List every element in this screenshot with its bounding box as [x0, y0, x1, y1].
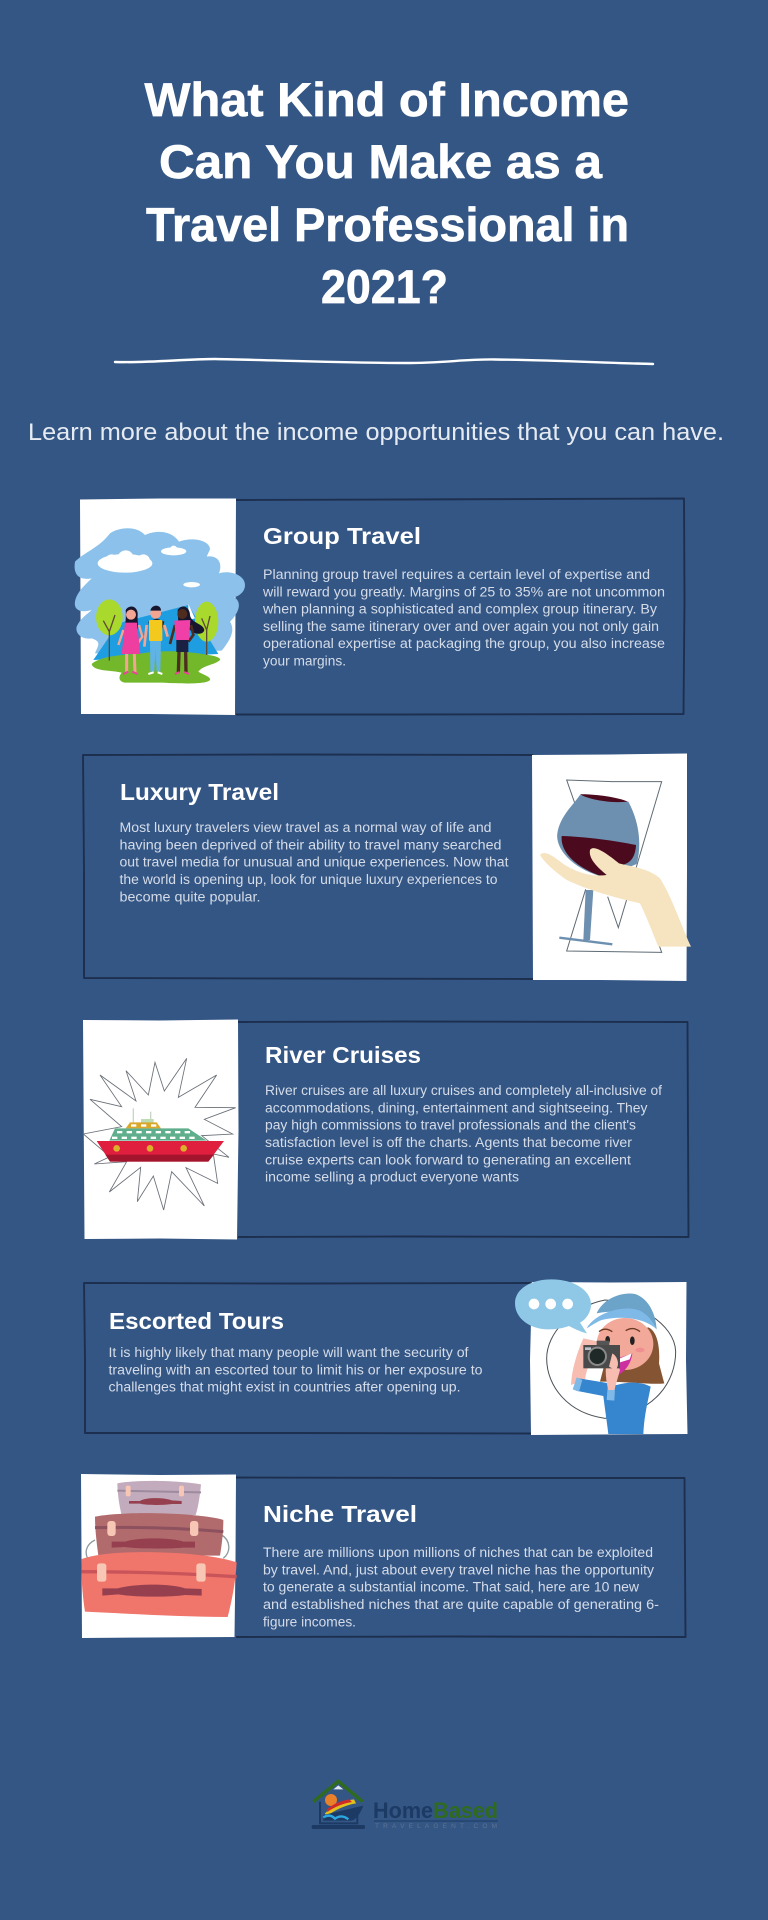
body text: satisfaction level is off the charts. Agents that become river	[265, 1135, 633, 1150]
body text: when planning a sophisticated and complex group itinerary. By	[262, 602, 657, 617]
body text	[108, 1345, 483, 1395]
logo: HomeBased Travel Agent	[312, 1781, 498, 1830]
body text: out travel media for unusual and unique experiences. Now that	[120, 855, 509, 870]
panel: group travel	[75, 498, 685, 715]
body text: River cruises are all luxury cruises and completely all-inclusive of	[265, 1083, 662, 1098]
panel: luxury travel	[83, 754, 691, 981]
body text: Most luxury travelers view travel as a normal way of life and	[120, 820, 491, 835]
white card	[532, 754, 687, 981]
icon: hand holding wine glass	[540, 780, 691, 952]
white card	[530, 1282, 688, 1435]
body text: and established niches that are quite capable of generating 6-	[263, 1597, 659, 1612]
white card	[83, 1020, 238, 1240]
icon: cruise ship on a starburst	[83, 1058, 236, 1210]
body text: income selling a product everyone wants	[265, 1170, 519, 1185]
title: 2021?	[321, 260, 448, 313]
body text: cruise experts can look forward to generating an excellent	[265, 1152, 631, 1167]
white card	[80, 498, 236, 715]
body text: the world is opening up, look for unique luxury experiences to	[120, 872, 498, 887]
heading: Escorted Tours	[109, 1308, 284, 1334]
panel: niche travel	[81, 1474, 686, 1638]
body text: selling the same itinerary over and over again you not only gain	[263, 619, 659, 634]
body text: to generate a substantial income. That said, here are 10 new	[263, 1580, 639, 1595]
body text	[262, 567, 665, 668]
icon: house with cruise ship	[312, 1781, 365, 1829]
person: girl in pink top	[170, 606, 204, 674]
body text: operational expertise at packaging the group, you also increase	[263, 636, 665, 651]
body text: become quite popular.	[120, 890, 260, 905]
subtitle: Learn more about the income opportunities that you can have.	[28, 419, 724, 446]
heading: River Cruises	[265, 1042, 421, 1068]
title	[144, 73, 629, 313]
body text: traveling with an escorted tour to limit his or her exposure to	[108, 1362, 483, 1377]
body text: It is highly likely that many people will want the security of	[108, 1345, 469, 1360]
title: What Kind of Income	[144, 73, 629, 126]
heading: Niche Travel	[263, 1501, 417, 1527]
heading: Group Travel	[263, 523, 421, 549]
body text: challenges that might exist in countries after opening up.	[108, 1380, 460, 1395]
white card	[81, 1474, 236, 1638]
title: Can You Make as a	[159, 135, 603, 188]
panel: river cruises	[83, 1020, 688, 1240]
heading: Luxury Travel	[120, 779, 279, 805]
body text: by travel. And, just about every travel niche has the opportunity	[263, 1562, 654, 1577]
person: girl in pink dress	[118, 606, 142, 674]
body text: figure incomes.	[263, 1614, 356, 1629]
body text: accommodations, dining, entertainment and sightseeing. They	[265, 1100, 648, 1115]
icon: three friends in a park	[75, 528, 245, 683]
icon: tourist taking a photo	[515, 1279, 676, 1434]
tagline: TRAVELAGENT.COM	[375, 1823, 497, 1830]
person: boy with backpack	[144, 606, 168, 674]
body text	[263, 1545, 659, 1629]
icon: stacked suitcases	[81, 1481, 237, 1617]
body text	[120, 820, 509, 905]
wordmark: HomeBased	[373, 1798, 498, 1823]
body text: will reward you greatly. Margins of 25 to 35% are not uncommon	[262, 584, 665, 599]
title: Travel Professional in	[146, 198, 629, 251]
body text: your margins.	[263, 654, 346, 668]
body text: having been deprived of their ability to travel many searched	[120, 837, 502, 852]
body text: There are millions upon millions of niches that can be exploited	[263, 1545, 653, 1560]
panel: escorted tours	[84, 1279, 688, 1435]
body text: pay high commissions to travel professionals and the client's	[265, 1118, 636, 1133]
body text: Planning group travel requires a certain level of expertise and	[263, 567, 650, 582]
body text	[265, 1083, 662, 1185]
